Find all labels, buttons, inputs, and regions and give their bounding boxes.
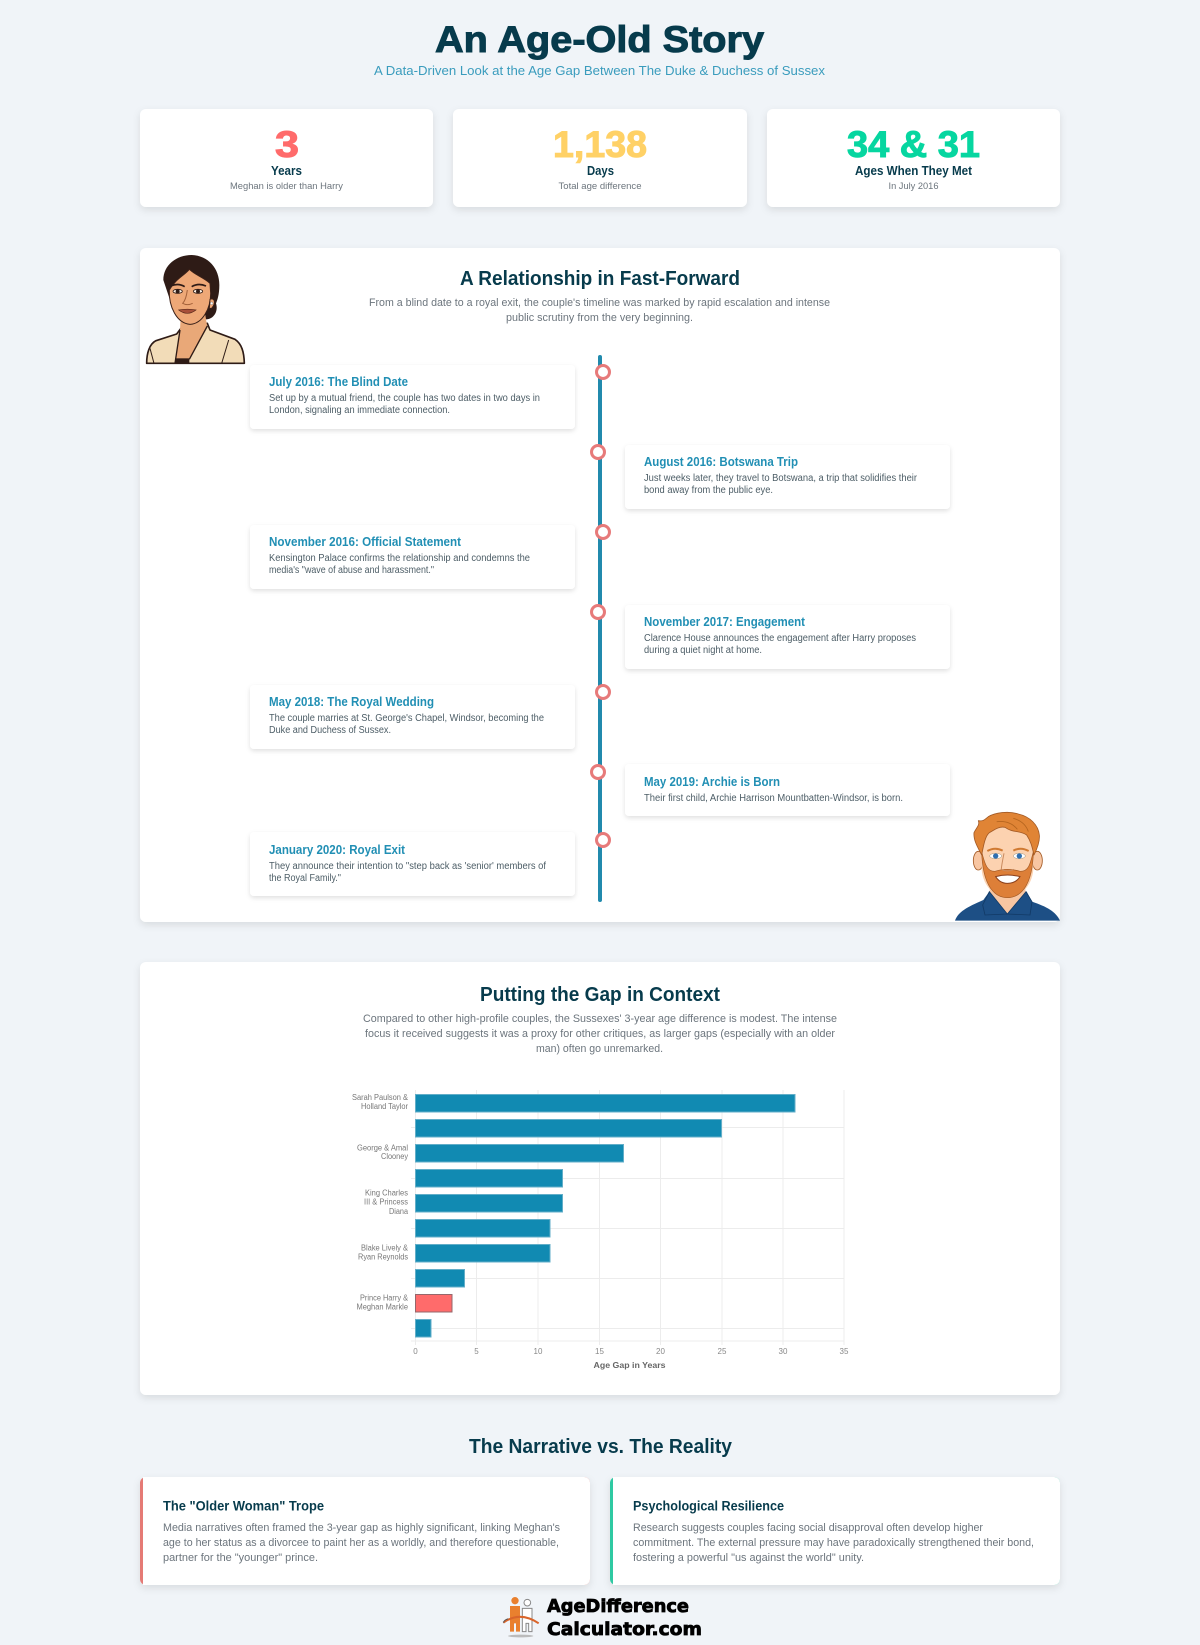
card: psychological resilience: Research suggests couples facing social disapproval often develop higher: [633, 1522, 983, 1534]
chart heading: Putting the Gap in Context: [480, 984, 720, 1006]
event: May 2018: Duke and Duchess of Sussex.: [269, 725, 391, 736]
event: November 2016: Kensington Palace confirms the relationship and condemns the: [269, 553, 531, 564]
bar chart: George & Amal: [357, 1144, 408, 1152]
stat card: ages when they met: Ages When They Met: [855, 164, 973, 178]
event: July 2016: [250, 365, 575, 429]
bar chart: Clooney: [381, 1152, 408, 1161]
card: psychological resilience: fostering a powerful "us against the world" unity.: [633, 1552, 864, 1564]
bar chart: Holland Taylor: [361, 1102, 408, 1111]
event: July 2016: London, signaling an immediate connection.: [269, 405, 450, 416]
event: November 2016: media's "wave of abuse and harassment.": [269, 565, 434, 576]
bar chart: 30: [779, 1347, 788, 1356]
event: May 2018: The couple marries at St. George's Chapel, Windsor, becoming the: [269, 713, 545, 724]
timeline heading: A Relationship in Fast-Forward: [460, 268, 740, 290]
bar chart: Age Gap in Years: [594, 1360, 666, 1370]
bar chart: 20: [656, 1347, 665, 1356]
logo: [503, 1596, 702, 1640]
panel: context chart: [140, 962, 1060, 1395]
bar chart: 0: [413, 1347, 418, 1356]
event: November 2017: Clarence House announces the engagement after Harry proposes: [644, 633, 916, 644]
stat card: 1,138 days: Total age difference: [558, 181, 642, 192]
event: November 2017: [625, 605, 950, 669]
card: psychological resilience: commitment. The external pressure may have paradoxically strengthened their bond,: [633, 1537, 1034, 1549]
event: January 2020: the Royal Family.": [269, 873, 341, 884]
event: November 2017: during a quiet night at home.: [644, 645, 762, 656]
bar chart: III & Princess: [364, 1198, 408, 1206]
event: January 2020: They announce their intention to "step back as 'senior' members of: [269, 861, 546, 872]
event: August 2016: Just weeks later, they travel to Botswana, a trip that solidifies their: [644, 473, 918, 484]
event: November 2016: November 2016: Official Statement: [269, 535, 462, 549]
chart intro: focus it received suggests it was a proxy for other critiques, as larger gaps (especially with an older: [365, 1028, 835, 1040]
event: August 2016: [625, 445, 950, 509]
card: older woman trope: age to her status as a divorcee to paint her as a worldly, and therefore questionable,: [163, 1537, 559, 1549]
bar chart: Sarah Paulson &: [352, 1093, 409, 1102]
stat card: 1,138 days: 1,138: [553, 124, 647, 165]
logo wordmark: [547, 1596, 702, 1640]
stat card: ages when they met: 34 & 31: [847, 124, 980, 165]
bar chart: Meghan Markle: [356, 1302, 409, 1312]
timeline spine: [592, 357, 610, 900]
event: January 2020: January 2020: Royal Exit: [269, 843, 406, 857]
card: older woman trope: partner for the "younger" prince.: [163, 1552, 318, 1564]
icon: Harry illustration: [955, 812, 1060, 921]
timeline intro: From a blind date to a royal exit, the couple's timeline was marked by rapid escalation and intense: [369, 297, 830, 309]
event: May 2019: [625, 764, 950, 816]
chart intro: [363, 1013, 837, 1055]
bar chart: 25: [718, 1347, 727, 1356]
bar chart: King Charles: [365, 1188, 408, 1198]
bar chart: Prince Harry &: [360, 1294, 409, 1302]
card: psychological resilience: Psychological Resilience: [633, 1498, 784, 1514]
card: older woman trope: The "Older Woman" Trope: [163, 1498, 324, 1514]
card: older woman trope: Media narratives often framed the 3-year gap as highly significant, linking Meghan's: [163, 1522, 561, 1534]
chart intro: man) often go unremarked.: [536, 1043, 663, 1055]
stat card: 1,138 days: Days: [587, 164, 614, 178]
logo wordmark: Calculator.com: [547, 1619, 702, 1640]
event: August 2016: August 2016: Botswana Trip: [644, 455, 798, 469]
bar chart: Blake Lively &: [361, 1244, 409, 1252]
event: May 2019: Their first child, Archie Harrison Mountbatten-Windsor, is born.: [644, 793, 903, 804]
event: November 2016: [250, 525, 575, 589]
bar chart: Diana: [389, 1207, 408, 1216]
icon: Meghan illustration: [147, 255, 244, 363]
timeline intro: [369, 297, 830, 324]
card: older woman trope: [140, 1477, 590, 1585]
bar chart: Ryan Reynolds: [358, 1252, 408, 1262]
bar chart: 15: [595, 1347, 604, 1356]
stat card: 3 years: Meghan is older than Harry: [230, 181, 343, 192]
stat card: ages when they met: In July 2016: [888, 181, 938, 192]
icon: logo figures: [503, 1597, 539, 1637]
event: August 2016: bond away from the public eye.: [644, 485, 773, 496]
stat card: 3 years: Years: [271, 164, 302, 178]
bar chart: 5: [474, 1347, 479, 1356]
event: November 2017: November 2017: Engagement: [644, 615, 806, 629]
card: psychological resilience: [610, 1477, 1060, 1585]
panel: timeline: [140, 248, 1060, 922]
event: May 2019: May 2019: Archie is Born: [644, 775, 780, 789]
event: May 2018: May 2018: The Royal Wedding: [269, 695, 434, 709]
event: May 2018: [250, 685, 575, 749]
subtitle: A Data-Driven Look at the Age Gap Between The Duke & Duchess of Sussex: [374, 64, 826, 78]
header: [374, 19, 826, 78]
bar chart: [352, 1090, 849, 1370]
event: July 2016: July 2016: The Blind Date: [269, 375, 408, 389]
chart intro: Compared to other high-profile couples, the Sussexes' 3-year age difference is modest. The intense: [363, 1013, 837, 1025]
timeline intro: public scrutiny from the very beginning.: [506, 312, 693, 324]
stat card: ages when they met: [767, 109, 1060, 207]
bar chart: 10: [534, 1347, 543, 1356]
bar chart: 35: [840, 1347, 849, 1356]
event: January 2020: [250, 832, 575, 896]
stat card: 1,138 days: [453, 109, 747, 207]
stat card: 3 years: 3: [275, 124, 299, 165]
stat card: 3 years: [140, 109, 433, 207]
title: An Age-Old Story: [435, 19, 764, 60]
section heading: narrative vs reality: The Narrative vs. The Reality: [469, 1436, 733, 1458]
logo wordmark: AgeDifference: [547, 1596, 689, 1617]
event: July 2016: Set up by a mutual friend, the couple has two dates in two days in: [269, 393, 540, 404]
